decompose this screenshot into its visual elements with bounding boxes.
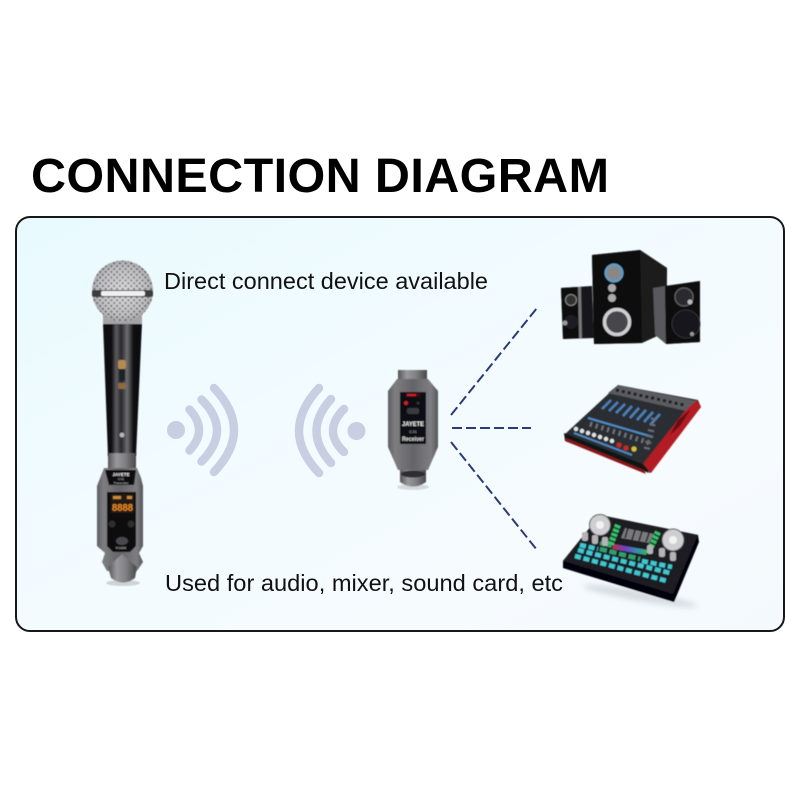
icon: receiver: Receiver: [402, 437, 425, 443]
icon: transmitter: JAYETE: [112, 472, 130, 477]
icon: transmitter: POWER: [116, 546, 126, 550]
icon: sound card: [563, 514, 699, 611]
panel: connection diagram: [16, 217, 784, 631]
text: used for caption: Used for audio, mixer, sound card, etc: [165, 570, 563, 596]
icon: receiver: C-01: [409, 430, 417, 434]
icon: receiver: JAYETE: [402, 422, 424, 428]
icon: transmitter: 8888: [112, 502, 133, 514]
icon: receiver: [388, 370, 438, 490]
arrow: dashed line to mixer: [452, 427, 531, 429]
title: CONNECTION DIAGRAM: [31, 149, 609, 203]
icon: transmitter: Transmitter: [113, 481, 129, 485]
icon: speakers: [561, 250, 700, 344]
icon: transmitter: [97, 453, 143, 586]
arrow: dashed line to sound card: [451, 442, 537, 550]
icon: transmitter: C-01: [118, 477, 124, 481]
text: direct connect caption: Direct connect device available: [164, 268, 488, 294]
icon: right wireless waves: [299, 388, 366, 473]
icon: left wireless waves: [167, 388, 234, 472]
icon: microphone: [92, 260, 153, 456]
icon: mixer: [564, 385, 701, 474]
arrow: dashed line to speakers: [451, 308, 537, 415]
